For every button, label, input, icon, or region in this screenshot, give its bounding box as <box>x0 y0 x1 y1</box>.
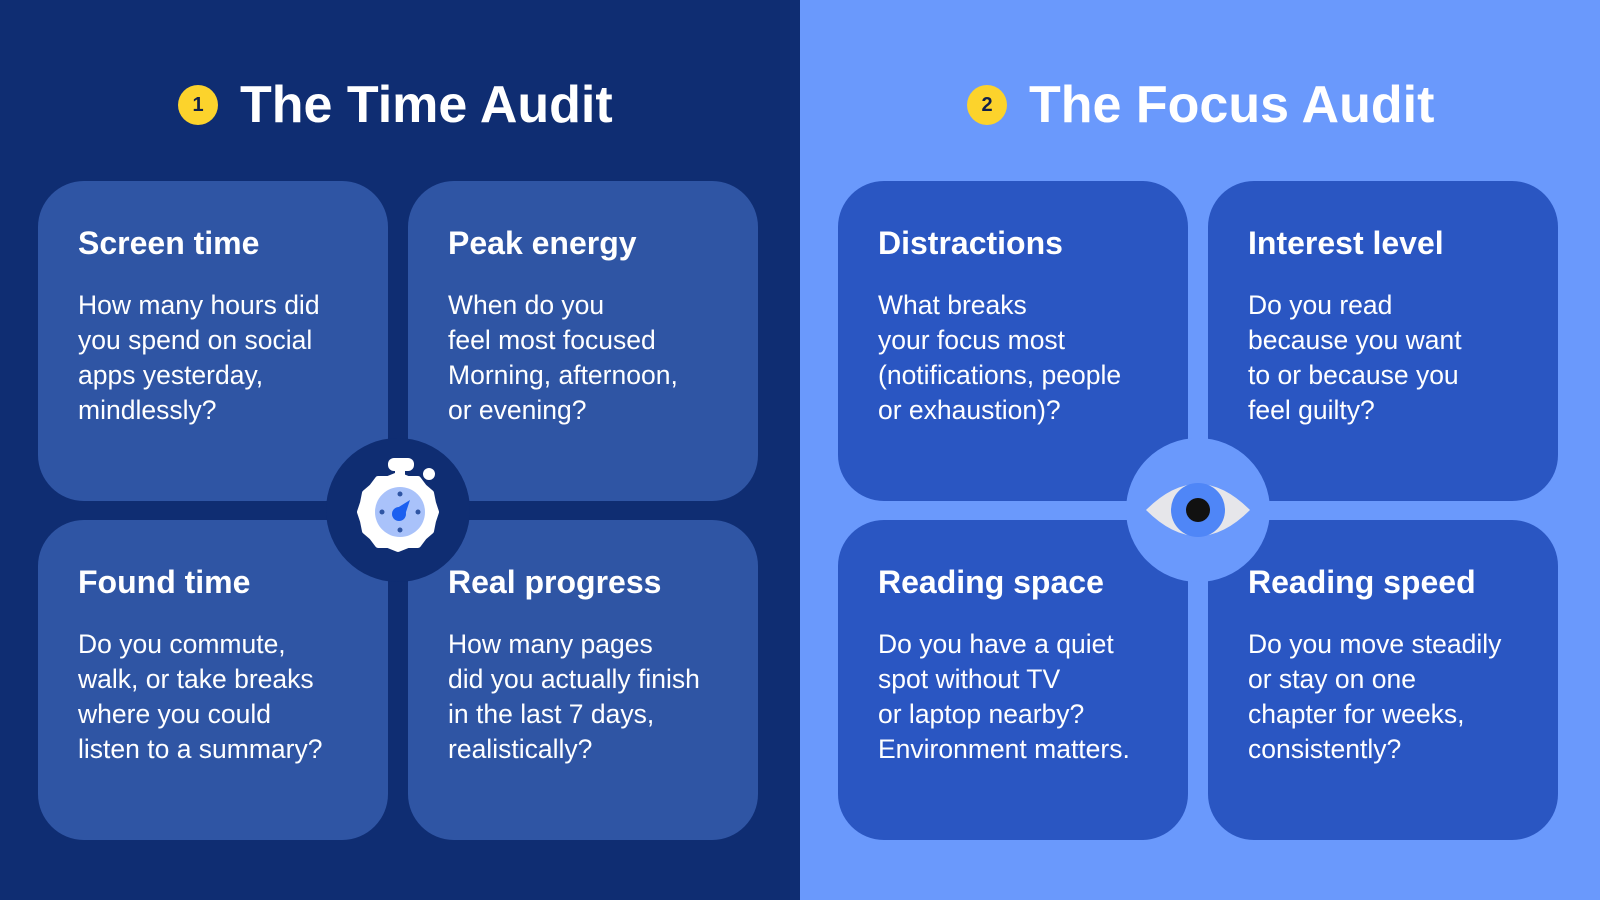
card: screen time: you spend on social <box>78 325 312 355</box>
card: reading space: or laptop nearby? <box>878 699 1084 729</box>
card: found time: where you could <box>78 699 271 729</box>
card: real progress: realistically? <box>448 734 592 764</box>
card: interest level <box>1208 181 1558 501</box>
card: screen time: mindlessly? <box>78 395 216 425</box>
card: reading speed: or stay on one <box>1248 664 1416 694</box>
card: distractions: your focus most <box>878 325 1065 355</box>
icon: eye <box>1126 438 1270 582</box>
title: time audit: The Time Audit <box>240 76 613 134</box>
card: reading speed: chapter for weeks, <box>1248 699 1465 729</box>
card: interest level: feel guilty? <box>1248 395 1375 425</box>
card: found time: Do you commute, <box>78 629 286 659</box>
card: peak energy: Peak energy <box>448 225 637 261</box>
card: distractions: Distractions <box>878 225 1063 261</box>
card: distractions: What breaks <box>878 290 1027 320</box>
title: focus audit: The Focus Audit <box>1029 76 1434 134</box>
card: found time: listen to a summary? <box>78 734 322 764</box>
panel: focus audit <box>800 0 1600 900</box>
card: reading space: spot without TV <box>878 664 1060 694</box>
card: distractions <box>838 181 1188 501</box>
card: reading speed: consistently? <box>1248 734 1401 764</box>
card: reading speed: Reading speed <box>1248 564 1476 600</box>
card: screen time: How many hours did <box>78 290 320 320</box>
card: peak energy <box>408 181 758 501</box>
card: found time <box>38 520 388 840</box>
card: distractions: (notifications, people <box>878 360 1121 390</box>
card: reading speed <box>1208 520 1558 840</box>
card: peak energy: Morning, afternoon, <box>448 360 678 390</box>
card: interest level: Interest level <box>1248 225 1444 261</box>
card: found time: walk, or take breaks <box>78 664 314 694</box>
card: reading space <box>838 520 1188 840</box>
card: interest level: because you want <box>1248 325 1462 355</box>
title: time audit: 1 <box>192 94 204 116</box>
card: interest level: to or because you <box>1248 360 1459 390</box>
panel: time audit <box>0 0 800 900</box>
card: screen time <box>38 181 388 501</box>
card: real progress <box>408 520 758 840</box>
card: peak energy: or evening? <box>448 395 586 425</box>
card: distractions: or exhaustion)? <box>878 395 1061 425</box>
card: screen time: apps yesterday, <box>78 360 263 390</box>
card: peak energy: feel most focused <box>448 325 656 355</box>
card: real progress: did you actually finish <box>448 664 700 694</box>
card: real progress: Real progress <box>448 564 661 600</box>
icon: stopwatch <box>326 438 470 582</box>
title: focus audit: 2 <box>981 94 993 116</box>
card: reading speed: Do you move steadily <box>1248 629 1501 659</box>
card: screen time: Screen time <box>78 225 259 261</box>
card: reading space: Environment matters. <box>878 734 1130 764</box>
card: reading space: Do you have a quiet <box>878 629 1114 659</box>
card: real progress: in the last 7 days, <box>448 699 654 729</box>
card: reading space: Reading space <box>878 564 1104 600</box>
card: found time: Found time <box>78 564 250 600</box>
card: interest level: Do you read <box>1248 290 1392 320</box>
card: peak energy: When do you <box>448 290 604 320</box>
card: real progress: How many pages <box>448 629 653 659</box>
